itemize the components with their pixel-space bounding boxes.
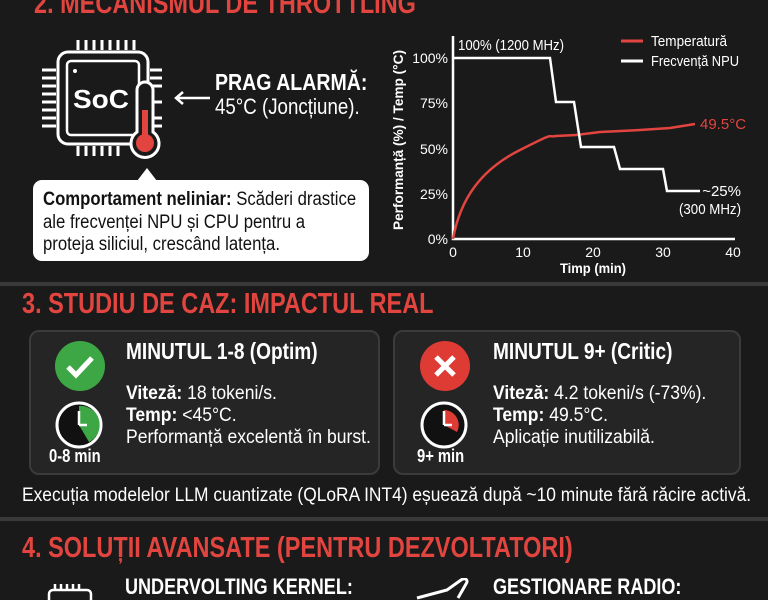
text: alarm threshold bbox=[215, 69, 367, 119]
chart: throttling: Frecvență NPU bbox=[651, 53, 739, 70]
text: card 2 body: Aplicație inutilizabilă. bbox=[493, 426, 655, 448]
text: alarm threshold: PRAG ALARMĂ: bbox=[215, 69, 367, 95]
icon: SoC chip with thermometer: SoC bbox=[73, 84, 129, 114]
chart: throttling: 20 bbox=[585, 244, 601, 260]
chart: throttling: 40 bbox=[725, 244, 741, 260]
panel: minutes 1-8 bbox=[29, 330, 380, 475]
chart: throttling: Performanță (%) / Temp (°C) bbox=[390, 50, 406, 230]
chart: throttling: 100% (1200 MHz) bbox=[458, 37, 564, 54]
icon: chip partial bbox=[48, 584, 92, 600]
callout: nonlinear behavior bbox=[33, 180, 369, 261]
text: card 2 body: Temp: 49.5°C. bbox=[493, 404, 608, 426]
chart: throttling bbox=[390, 33, 746, 276]
heading: section 3: 3. STUDIU DE CAZ: IMPACTUL REAL bbox=[22, 288, 434, 320]
text: undervolting: UNDERVOLTING KERNEL: bbox=[125, 574, 353, 599]
chart: throttling: 25% bbox=[420, 186, 448, 202]
callout: nonlinear behavior: Comportament neliniar: Scăderi drastice bbox=[43, 189, 356, 210]
chart: throttling: 75% bbox=[420, 95, 448, 111]
chart: throttling: (300 MHz) bbox=[679, 201, 741, 218]
icon: clock 0-8 bbox=[56, 402, 102, 448]
text: card 2 body: Viteză: 4.2 tokeni/s (-73%). bbox=[493, 382, 706, 404]
callout: nonlinear behavior: ale frecvenței NPU și CPU pentru a bbox=[43, 212, 305, 232]
text: footnote: Execuția modelelor LLM cuantizate (QLoRA INT4) eșuează după ~10 minute fără răcire activă. bbox=[22, 485, 751, 506]
panel: minute 9+ bbox=[393, 330, 741, 475]
icon: green check bbox=[55, 341, 105, 391]
heading: section 4: 4. SOLUȚII AVANSATE (PENTRU DEZVOLTATORI) bbox=[22, 532, 573, 564]
panel: minutes 1-8: 0-8 min bbox=[49, 446, 101, 466]
chart: throttling: 49.5°C bbox=[700, 116, 746, 133]
arrow: to chip bbox=[174, 91, 210, 105]
icon: clock 9+ bbox=[420, 402, 468, 448]
chart: throttling: Timp (min) bbox=[560, 260, 626, 276]
icon: SoC chip with thermometer bbox=[42, 40, 162, 159]
chart: throttling: 10 bbox=[515, 244, 531, 260]
text: card 1 body: Viteză: 18 tokeni/s. bbox=[126, 382, 277, 404]
chart: throttling: ~25% bbox=[702, 183, 741, 200]
text: card 1 body: Performanță excelentă în burst. bbox=[126, 426, 371, 448]
chart: throttling: 0 bbox=[449, 244, 457, 260]
text: alarm threshold: 45°C (Joncțiune). bbox=[215, 94, 360, 119]
text: card 2 body bbox=[493, 382, 706, 448]
text: card 1 body bbox=[126, 382, 371, 448]
text: card 2 title: MINUTUL 9+ (Critic) bbox=[493, 338, 672, 364]
chart: throttling: Temperatură bbox=[651, 33, 728, 50]
panel: minute 9+: 9+ min bbox=[417, 446, 464, 466]
icon: airplane partial bbox=[416, 578, 469, 600]
chart: throttling: 100% bbox=[412, 50, 448, 66]
text: card 1 title: MINUTUL 1-8 (Optim) bbox=[126, 338, 318, 364]
text: card 1 body: Temp: <45°C. bbox=[126, 404, 237, 426]
callout: nonlinear behavior: proteja siliciul, crescând latența. bbox=[43, 234, 280, 255]
chart: throttling: 30 bbox=[655, 244, 671, 260]
icon: red x bbox=[420, 341, 470, 391]
chart: throttling: 50% bbox=[420, 141, 448, 157]
text: radio: GESTIONARE RADIO: bbox=[493, 574, 681, 599]
chart: throttling: 0% bbox=[428, 231, 448, 247]
